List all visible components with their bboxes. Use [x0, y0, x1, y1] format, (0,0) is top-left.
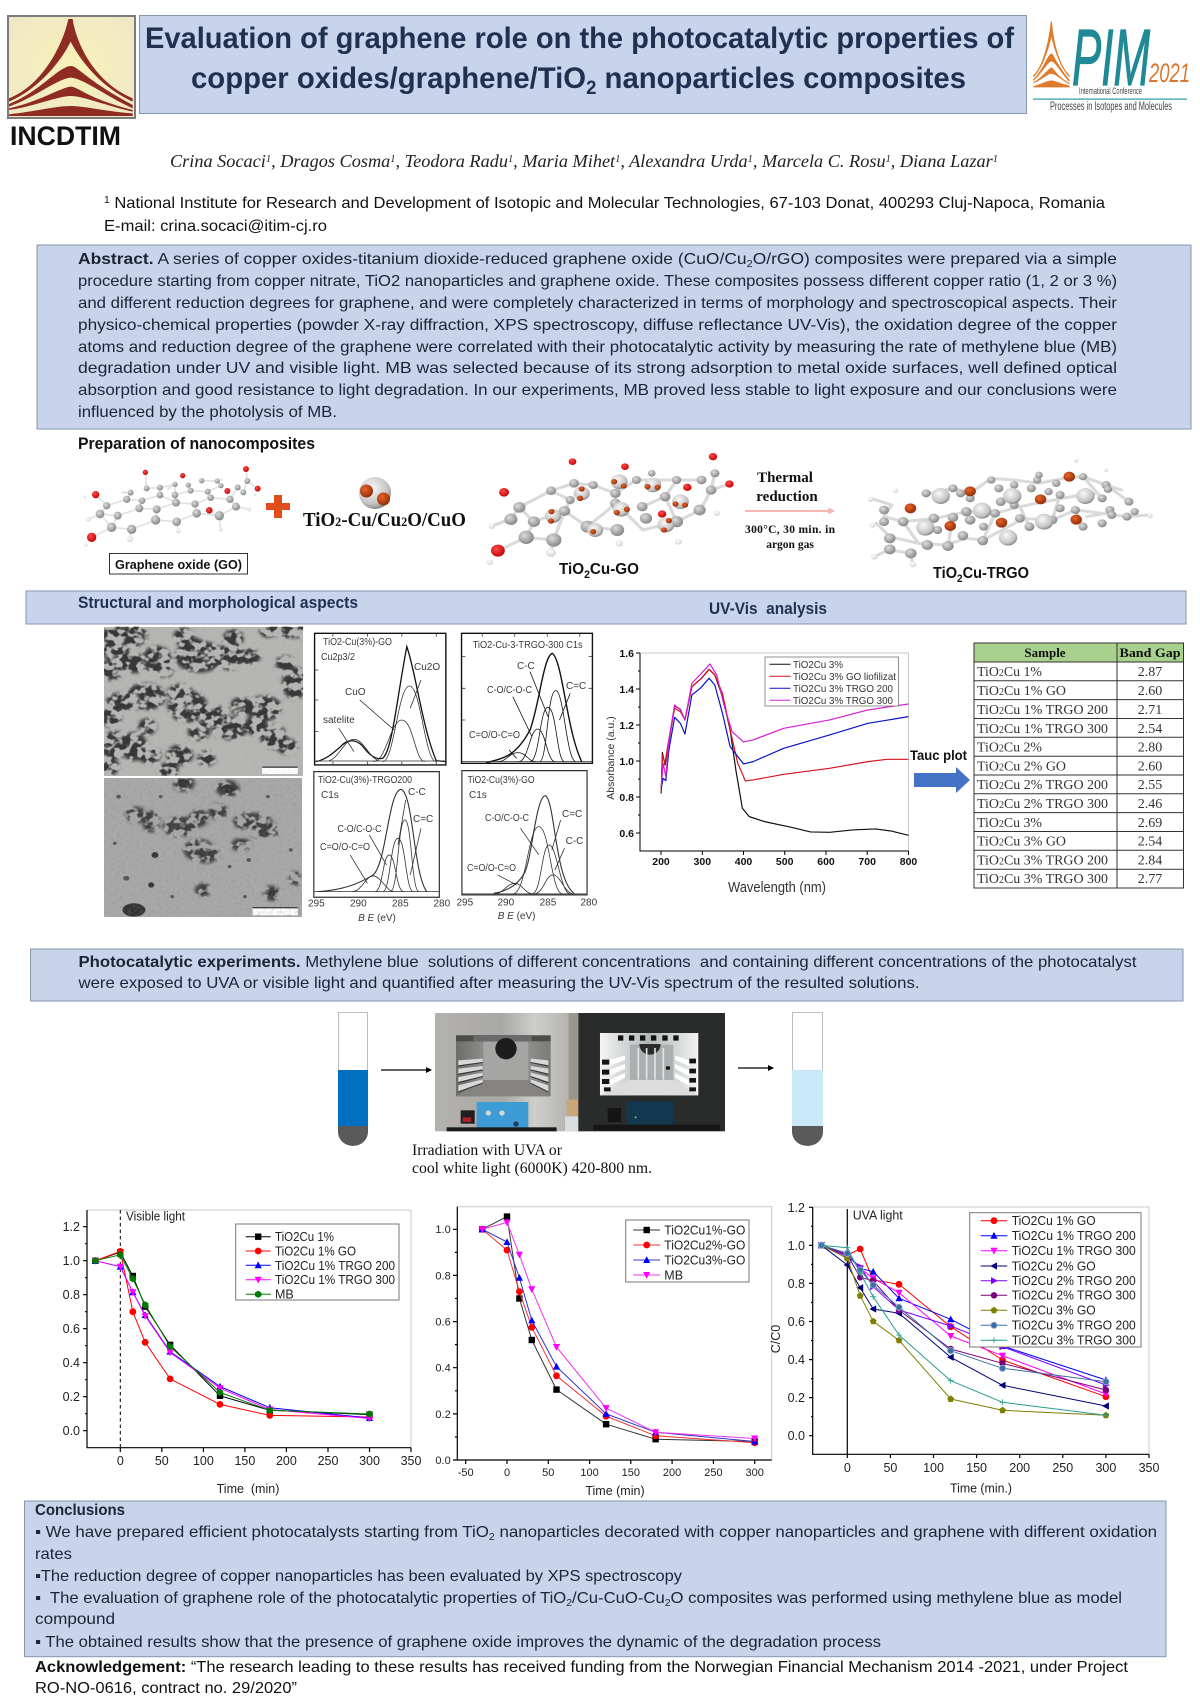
- chart: UVA light: 0: [844, 1461, 851, 1475]
- chart: UVA light: 0.6: [788, 1315, 805, 1329]
- chart: UV-Vis absorbance: 1.0: [619, 756, 634, 768]
- authors: , Alexandra Urda: [620, 151, 748, 171]
- chart: XPS C1s TRGO200: 280: [434, 899, 451, 910]
- chart: visible light TiO2Cu 1%: 1.2: [63, 1220, 80, 1234]
- heading: UV-Vis analysis: UV-Vis analysis: [709, 599, 827, 618]
- arrow: into irradiation: [381, 1069, 431, 1071]
- table: band gap: TiO2Cu 2% TRGO 300: [977, 797, 1108, 812]
- table: band gap: 2.80: [1138, 740, 1162, 756]
- chart: visible light TiO2Cu 1%: 100: [193, 1454, 214, 1468]
- chart: visible light TiO2Cu 1%: 0: [117, 1454, 124, 1468]
- molecule: graphene oxide: [83, 466, 261, 547]
- abstract text: absorption and good resistance to light degradation. In our experiments, MB proved less stable to light exposure and our conclusions were: [78, 382, 1117, 399]
- conclusions list: ▪ The evaluation of graphene role of the photocatalytic properties of TiO: [35, 1590, 545, 1607]
- chart: UVA light: 200: [1009, 1461, 1030, 1475]
- chart: UV-Vis absorbance: Absorbance (a.u.): [605, 716, 617, 800]
- legend: visible light: [236, 1224, 399, 1302]
- caption: irradiation: [412, 1142, 652, 1177]
- chart: TiO2Cu GO series: 100: [580, 1467, 599, 1479]
- chart: visible light TiO2Cu 1%: 1.0: [63, 1254, 80, 1268]
- authors: 1: [748, 154, 753, 165]
- conclusions list: ▪ The obtained results show that the presence of graphene oxide improves the dynamic of the degradation process: [35, 1634, 881, 1651]
- chart: visible light TiO2Cu 1%: 0.8: [63, 1288, 80, 1302]
- chart: UVA light: 1.0: [788, 1239, 805, 1253]
- chart: TiO2Cu GO series: 1.0: [435, 1224, 451, 1236]
- table: band gap: TiO2Cu 1%: [977, 665, 1042, 680]
- table: band gap: 2.54: [1138, 722, 1162, 737]
- chart: UV-Vis absorbance: 1.2: [619, 720, 634, 732]
- conclusions list: ▪The reduction degree of copper nanoparticles has been evaluated by XPS spectroscopy: [35, 1568, 682, 1585]
- chart: UV-Vis absorbance: 800: [900, 856, 917, 868]
- table: band gap: 2.46: [1138, 797, 1162, 812]
- chart: UV-Vis absorbance: 300: [694, 856, 711, 868]
- chart: XPS C1s TRGO200: TiO2-Cu(3%)-TRGO200: [318, 775, 412, 786]
- authors: , Maria Mihet: [513, 151, 616, 171]
- icon: test tube methylene blue: [338, 1012, 368, 1146]
- legend: visible light: MB: [275, 1288, 294, 1302]
- molecule: TiO2Cu-GO: [487, 453, 734, 565]
- arrow: Tauc plot to table: [914, 767, 970, 793]
- chart: UV-Vis absorbance: 600: [817, 856, 835, 868]
- chart: UVA light: UVA light: [853, 1208, 903, 1222]
- chart: UV-Vis absorbance: 1.6: [619, 648, 634, 660]
- conclusions list: /Cu-CuO-Cu: [572, 1590, 665, 1607]
- legend: UVA light: [970, 1213, 1141, 1348]
- acknowledgement: RO-NO-0616, contract no. 29/2020”: [35, 1680, 297, 1697]
- authors: 1: [390, 154, 396, 165]
- authors: 1: [886, 154, 891, 165]
- legend: visible light: TiO2Cu 1% TRGO 300: [275, 1273, 395, 1287]
- chart: visible light TiO2Cu 1%: 350: [401, 1454, 421, 1468]
- logo: INCDTIM: [8, 16, 135, 151]
- conclusions list: [35, 1524, 1157, 1651]
- chart: XPS Cu2p3/2: Cu2O: [414, 662, 440, 673]
- icon: plus sign: [266, 495, 290, 518]
- logo wordmark: INCDTIM: [10, 121, 121, 151]
- chart: UV-Vis absorbance: 500: [776, 856, 794, 868]
- legend: GO series: MB: [664, 1268, 683, 1282]
- table: band gap: 2.54: [1138, 834, 1162, 850]
- label: TiO2Cu-TRGO: TiO: [933, 565, 959, 582]
- chart: UVA light: 150: [966, 1461, 987, 1475]
- label: Tauc plot: Tauc plot: [910, 748, 967, 763]
- chart: XPS C1s GO: B E (eV): [498, 911, 535, 922]
- panel: conclusions: [24, 1501, 1166, 1657]
- photocatalytic text: Photocatalytic experiments. Methylene blue solutions of different concentrations and containing different concentrations of the photocatalyst: [78, 954, 1137, 971]
- chart: XPS C1s GO: C-O/C-O-C: [485, 813, 529, 824]
- legend: UV-Vis: TiO2Cu 3% GO liofilizat: [793, 671, 896, 683]
- chart: TiO2Cu GO series: 0.4: [435, 1363, 451, 1375]
- legend: UVA light: TiO2Cu 2% GO: [1012, 1259, 1096, 1273]
- abstract text: Abstract. A series of copper oxides-titanium dioxide-reduced graphene oxide (CuO/Cu: [78, 251, 698, 268]
- chart: visible light TiO2Cu 1%: Time (min): [217, 1482, 279, 1496]
- caption: irradiation: cool white light (6000K) 420-800 nm.: [412, 1160, 652, 1177]
- title line 2: nanoparticles composites: [596, 62, 966, 95]
- chart: visible light TiO2Cu 1%: 0.4: [63, 1356, 80, 1370]
- chart: XPS C1s TRGO-300: C=O/O-C=O: [469, 730, 520, 741]
- authors: , Diana Lazar: [891, 151, 993, 171]
- affiliation: National Institute for Research and Development of Isotopic and Molecular Technologies, 67-103 Donat, 400293 Cluj-Napoca, Romania: [110, 195, 1105, 212]
- chart: visible light TiO2Cu 1%: 50: [155, 1454, 169, 1468]
- legend: UVA light: TiO2Cu 3% TRGO 200: [1012, 1319, 1136, 1333]
- table: band gap: 2.60: [1138, 684, 1162, 699]
- authors: 1: [508, 154, 513, 165]
- authors: Crina Socaci: [170, 151, 262, 171]
- chart: TiO2Cu GO series: -50: [458, 1467, 474, 1479]
- abstract text: atoms and reduction degree of the graphene were correlated with their photocatalytic activity by measuring the rate of methylene blue (MB): [78, 339, 1117, 356]
- conclusions list: compound: [35, 1611, 115, 1628]
- chart: XPS Cu2p3/2: [315, 633, 446, 765]
- chart: UV-Vis absorbance: 200: [652, 856, 670, 868]
- chart: XPS C1s TRGO-300: [462, 633, 592, 763]
- authors: , Dragos Cosma: [271, 151, 391, 171]
- logo: PIM 2021: International Conference: [1079, 86, 1142, 96]
- chart: UVA light: C/C0: [769, 1325, 783, 1353]
- legend: GO series: TiO2Cu2%-GO: [664, 1238, 746, 1252]
- image: irradiation chamber photos: [435, 1013, 725, 1131]
- table: band gap: TiO2Cu 2%: [977, 740, 1042, 756]
- chart: XPS C1s TRGO-300: C-O/C-O-C: [487, 685, 532, 696]
- chart: TiO2Cu GO series: Time (min): [585, 1484, 645, 1498]
- chart: visible light TiO2Cu 1%: 300: [359, 1454, 380, 1468]
- conclusions list: 2: [665, 1598, 671, 1609]
- label: graphene oxide: [110, 554, 248, 574]
- abstract text: influenced by the photolysis of MB.: [78, 404, 337, 421]
- chart: UVA light: 0.0: [788, 1429, 805, 1443]
- title line 1: Evaluation of graphene role on the photocatalytic properties of: [145, 22, 1015, 55]
- icon: test tube decolorized: [792, 1012, 823, 1146]
- table: band gap: [974, 643, 1184, 888]
- chart: UV-Vis absorbance: Wavelength (nm): [728, 879, 826, 896]
- authors: 1: [615, 154, 620, 165]
- title line 2: copper oxides/graphene/TiO: [191, 62, 596, 95]
- chart: TiO2Cu GO series: 0.0: [435, 1455, 451, 1467]
- conclusions list: 2: [489, 1532, 495, 1543]
- chart: XPS C1s GO: [456, 771, 598, 922]
- label: TiO2-Cu/Cu2O/CuO: TiO2-Cu/Cu2O/CuO: [303, 509, 466, 531]
- legend: UVA light: TiO2Cu 3% TRGO 300: [1012, 1334, 1136, 1348]
- chart: TiO2Cu GO series: 300: [746, 1467, 764, 1479]
- chart: UVA light: 250: [1052, 1461, 1073, 1475]
- table: band gap: TiO2Cu 3% TRGO 300: [977, 872, 1108, 887]
- chart: XPS C1s GO: 285: [540, 898, 557, 908]
- photocatalytic text: were exposed to UVA or visible light and quantified after measuring the UV-Vis spectrum of the resulted solutions.: [77, 975, 920, 992]
- caption: irradiation: Irradiation with UVA or: [412, 1142, 563, 1159]
- arrow: thermal reduction: 300°C, 30 min. in: [745, 524, 836, 536]
- chart: TiO2Cu GO series: 200: [663, 1467, 681, 1479]
- arrow: thermal reduction: reduction: [756, 489, 818, 505]
- authors: , Teodora Radu: [396, 151, 508, 171]
- label: TiO2Cu-TRGO: Cu-TRGO: [963, 565, 1029, 582]
- chart: UVA light: 50: [883, 1461, 897, 1475]
- legend: GO series: [626, 1220, 749, 1282]
- legend: visible light: TiO2Cu 1%: [275, 1230, 334, 1244]
- table: band gap: 2.87: [1138, 665, 1162, 680]
- chart: TiO2Cu GO series: 150: [622, 1467, 640, 1479]
- table: band gap: Band Gap: [1120, 645, 1180, 660]
- heading: preparation of nanocomposites: Preparation of nanocomposites: [78, 434, 315, 453]
- chart: visible light TiO2Cu 1%: 0.2: [63, 1390, 80, 1404]
- chart: UVA light: 0.2: [788, 1391, 805, 1405]
- panel: photocatalytic experiments: [30, 949, 1183, 1001]
- chart: UVA light: 300: [1095, 1461, 1116, 1475]
- conclusions list: 2: [566, 1598, 573, 1609]
- chart: UV-Vis absorbance: [605, 648, 917, 896]
- title banner: [140, 16, 1026, 114]
- chart: XPS C1s TRGO200: C-O/C-O-C: [338, 824, 382, 835]
- chart: XPS C1s GO: TiO2-Cu(3%)-GO: [468, 775, 535, 786]
- chart: XPS C1s TRGO200: C=C: [413, 814, 433, 825]
- table: band gap: TiO2Cu 2% TRGO 200: [977, 778, 1108, 793]
- chart: XPS C1s GO: 295: [456, 898, 474, 908]
- table: band gap: 2.55: [1138, 778, 1162, 793]
- legend: UVA light: TiO2Cu 1% TRGO 200: [1012, 1229, 1136, 1243]
- abstract text: 2: [747, 259, 753, 270]
- arrow: thermal reduction: [745, 470, 836, 551]
- label: graphene oxide: Graphene oxide (GO): [115, 557, 242, 572]
- table: band gap: TiO2Cu 2% GO: [977, 760, 1066, 774]
- table: band gap: TiO2Cu 1% GO: [977, 684, 1066, 699]
- label: TiO2Cu-GO: Cu-GO: [590, 561, 639, 578]
- table: band gap: 2.84: [1138, 854, 1162, 868]
- chart: visible light TiO2Cu 1%: 250: [318, 1454, 338, 1468]
- chart: XPS C1s TRGO200: 290: [350, 899, 367, 910]
- legend: UV-Vis: TiO2Cu 3% TRGO 300: [793, 695, 893, 707]
- chart: XPS C1s TRGO200: C-C: [408, 787, 426, 798]
- molecule: TiO2Cu-TRGO: [868, 459, 1153, 567]
- table: band gap: 2.77: [1138, 872, 1162, 887]
- chart: XPS C1s GO: C=C: [562, 809, 582, 820]
- chart: XPS C1s GO: 280: [580, 898, 598, 908]
- authors: , Marcela C. Rosu: [753, 151, 886, 171]
- legend: UVA light: TiO2Cu 1% GO: [1012, 1214, 1096, 1228]
- image: TEM micrograph 1: [104, 626, 305, 776]
- chart: XPS Cu2p3/2: Cu2p3/2: [321, 652, 355, 663]
- label: TiO2Cu-GO: TiO: [559, 561, 585, 578]
- chart: UV-Vis absorbance: 0.8: [619, 792, 634, 804]
- chart: XPS C1s GO: C-C: [566, 836, 583, 847]
- chart: XPS Cu2p3/2: CuO: [345, 687, 366, 698]
- chart: TiO2Cu GO series: [435, 1207, 772, 1498]
- chart: XPS C1s TRGO200: C=O/O-C=O: [320, 842, 370, 853]
- chart: visible light TiO2Cu 1%: [63, 1210, 421, 1496]
- table: band gap: TiO2Cu 3%: [977, 816, 1042, 831]
- chart: TiO2Cu GO series: 50: [542, 1467, 554, 1479]
- arrow: out of irradiation: [738, 1067, 773, 1069]
- affiliation: [104, 195, 1105, 235]
- legend: GO series: TiO2Cu1%-GO: [664, 1224, 746, 1238]
- heading: structural and morphological aspects: Structural and morphological aspects: [78, 593, 358, 612]
- chart: XPS Cu2p3/2: TiO2-Cu(3%)-GO: [323, 637, 392, 648]
- chart: UV-Vis absorbance: 0.6: [619, 828, 634, 840]
- affiliation: 1: [104, 195, 110, 206]
- chart: XPS C1s TRGO200: 295: [308, 899, 325, 910]
- chart: XPS C1s TRGO-300: C-C: [517, 661, 535, 672]
- legend: visible light: TiO2Cu 1% GO: [275, 1244, 356, 1258]
- abstract text: and different reduction degrees for graphene, and were completely characterized in terms of morphology and spectroscopical aspects. Their: [78, 295, 1118, 312]
- chart: UVA light: 1.2: [788, 1201, 805, 1215]
- table: band gap: 2.60: [1138, 760, 1162, 774]
- chart: TiO2Cu GO series: 0.8: [435, 1270, 451, 1282]
- chart: XPS C1s TRGO200: 285: [392, 899, 409, 910]
- heading: conclusions: Conclusions: [35, 1502, 125, 1519]
- legend: visible light: TiO2Cu 1% TRGO 200: [275, 1259, 395, 1273]
- abstract text: degradation under UV and visible light. MB was selected because of its strong adsorption to metal oxide surfaces, well defined optical: [78, 360, 1117, 377]
- table: band gap: 2.69: [1138, 816, 1162, 831]
- chart: UVA light: Time (min.): [950, 1482, 1012, 1496]
- chart: TiO2Cu GO series: 250: [704, 1467, 723, 1479]
- chart: UVA light: 100: [923, 1461, 944, 1475]
- abstract text: [78, 251, 1118, 421]
- chart: XPS C1s GO: C=O/O-C=O: [467, 863, 516, 874]
- authors: 1: [266, 154, 271, 165]
- table: band gap: Sample: [1024, 645, 1066, 660]
- abstract text: physico-chemical properties (powder X-ray diffraction, XPS spectroscopy, diffuse reflectance UV-Vis), the oxidation degree of the copper: [78, 317, 1118, 334]
- chart: UV-Vis absorbance: 1.4: [619, 684, 634, 696]
- chart: XPS C1s GO: C1s: [469, 790, 487, 801]
- e-mail: E-mail: crina.socaci@itim-cj.ro: [104, 218, 327, 235]
- acknowledgement: [35, 1659, 1129, 1697]
- chart: visible light TiO2Cu 1%: 200: [276, 1454, 297, 1468]
- chart: XPS C1s TRGO200: B E (eV): [358, 913, 396, 924]
- legend: UVA light: TiO2Cu 2% TRGO 300: [1012, 1289, 1136, 1303]
- authors: 1: [993, 154, 998, 165]
- image: TEM micrograph 2: [104, 778, 302, 917]
- chart: XPS C1s TRGO200: [308, 772, 451, 924]
- table: band gap: TiO2Cu 3% TRGO 200: [977, 854, 1108, 868]
- conclusions list: O composites was performed using methylene blue as model: [671, 1590, 1122, 1607]
- chart: XPS C1s TRGO-300: C=C: [566, 681, 586, 692]
- table: band gap: TiO2Cu 3% GO: [977, 834, 1066, 850]
- legend: UVA light: TiO2Cu 2% TRGO 200: [1012, 1274, 1136, 1288]
- icon: TiO2 particle: [359, 477, 391, 509]
- chart: UVA light: 0.4: [788, 1353, 805, 1367]
- arrow: thermal reduction: argon gas: [766, 539, 814, 551]
- chart: XPS C1s TRGO200: C1s: [321, 790, 339, 801]
- logo: PIM 2021: [1033, 13, 1190, 113]
- table: band gap: TiO2Cu 1% TRGO 200: [977, 703, 1108, 718]
- legend: UVA light: TiO2Cu 1% TRGO 300: [1012, 1244, 1136, 1258]
- conclusions list: ▪ We have prepared efficient photocatalysts starting from TiO: [35, 1524, 465, 1541]
- label: TiO2Cu-GO: 2: [584, 569, 590, 581]
- legend: UVA light: TiO2Cu 3% GO: [1012, 1304, 1096, 1318]
- conclusions list: nanoparticles decorated with copper nanoparticles and graphene with different oxidation: [495, 1524, 1157, 1541]
- table: band gap: TiO2Cu 1% TRGO 300: [977, 722, 1108, 737]
- chart: UVA light: [769, 1201, 1159, 1496]
- legend: UV-Vis: TiO2Cu 3%: [793, 659, 843, 671]
- chart: TiO2Cu GO series: 0.6: [435, 1316, 451, 1328]
- chart: XPS Cu2p3/2: satelite: [323, 715, 355, 726]
- photocatalytic text: [77, 954, 1137, 992]
- chart: UVA light: 0.8: [788, 1277, 805, 1291]
- label: TiO2Cu-TRGO: 2: [957, 573, 963, 585]
- table: band gap: 2.71: [1138, 703, 1162, 718]
- chart: XPS C1s GO: 290: [498, 898, 515, 908]
- chart: visible light TiO2Cu 1%: 0.6: [63, 1322, 80, 1336]
- abstract text: procedure starting from copper nitrate, TiO2 nanoparticles and graphene oxide. These composites possess different copper ratio (1, 2 or 3 %): [78, 273, 1117, 290]
- chart: visible light TiO2Cu 1%: Visible light: [126, 1210, 185, 1224]
- legend: GO series: TiO2Cu3%-GO: [664, 1254, 746, 1268]
- chart: visible light TiO2Cu 1%: 150: [234, 1454, 255, 1468]
- chart: UV-Vis absorbance: 400: [735, 856, 752, 868]
- chart: TiO2Cu GO series: 0: [504, 1467, 510, 1479]
- title line 2: 2: [586, 78, 596, 99]
- arrow: thermal reduction: Thermal: [757, 470, 813, 486]
- legend: UV-Vis: TiO2Cu 3% TRGO 200: [793, 683, 893, 695]
- chart: UV-Vis absorbance: 700: [858, 856, 876, 868]
- chart: UVA light: 350: [1139, 1461, 1159, 1475]
- panel: section header bar: [26, 591, 1186, 624]
- legend: UV-Vis: [765, 657, 898, 707]
- chart: TiO2Cu GO series: 0.2: [435, 1409, 451, 1421]
- panel: abstract: [37, 245, 1191, 429]
- abstract text: O/rGO) composites were prepared via a simple: [753, 251, 1117, 268]
- chart: visible light TiO2Cu 1%: 0.0: [63, 1424, 80, 1438]
- chart: XPS C1s TRGO-300: TiO2-Cu-3-TRGO-300 C1s: [473, 640, 583, 651]
- conclusions list: rates: [35, 1546, 72, 1563]
- acknowledgement: Acknowledgement: “The research leading to these results has received funding from the Norwegian Financial Mechanism 2014 -2021, under Project: [35, 1659, 1129, 1676]
